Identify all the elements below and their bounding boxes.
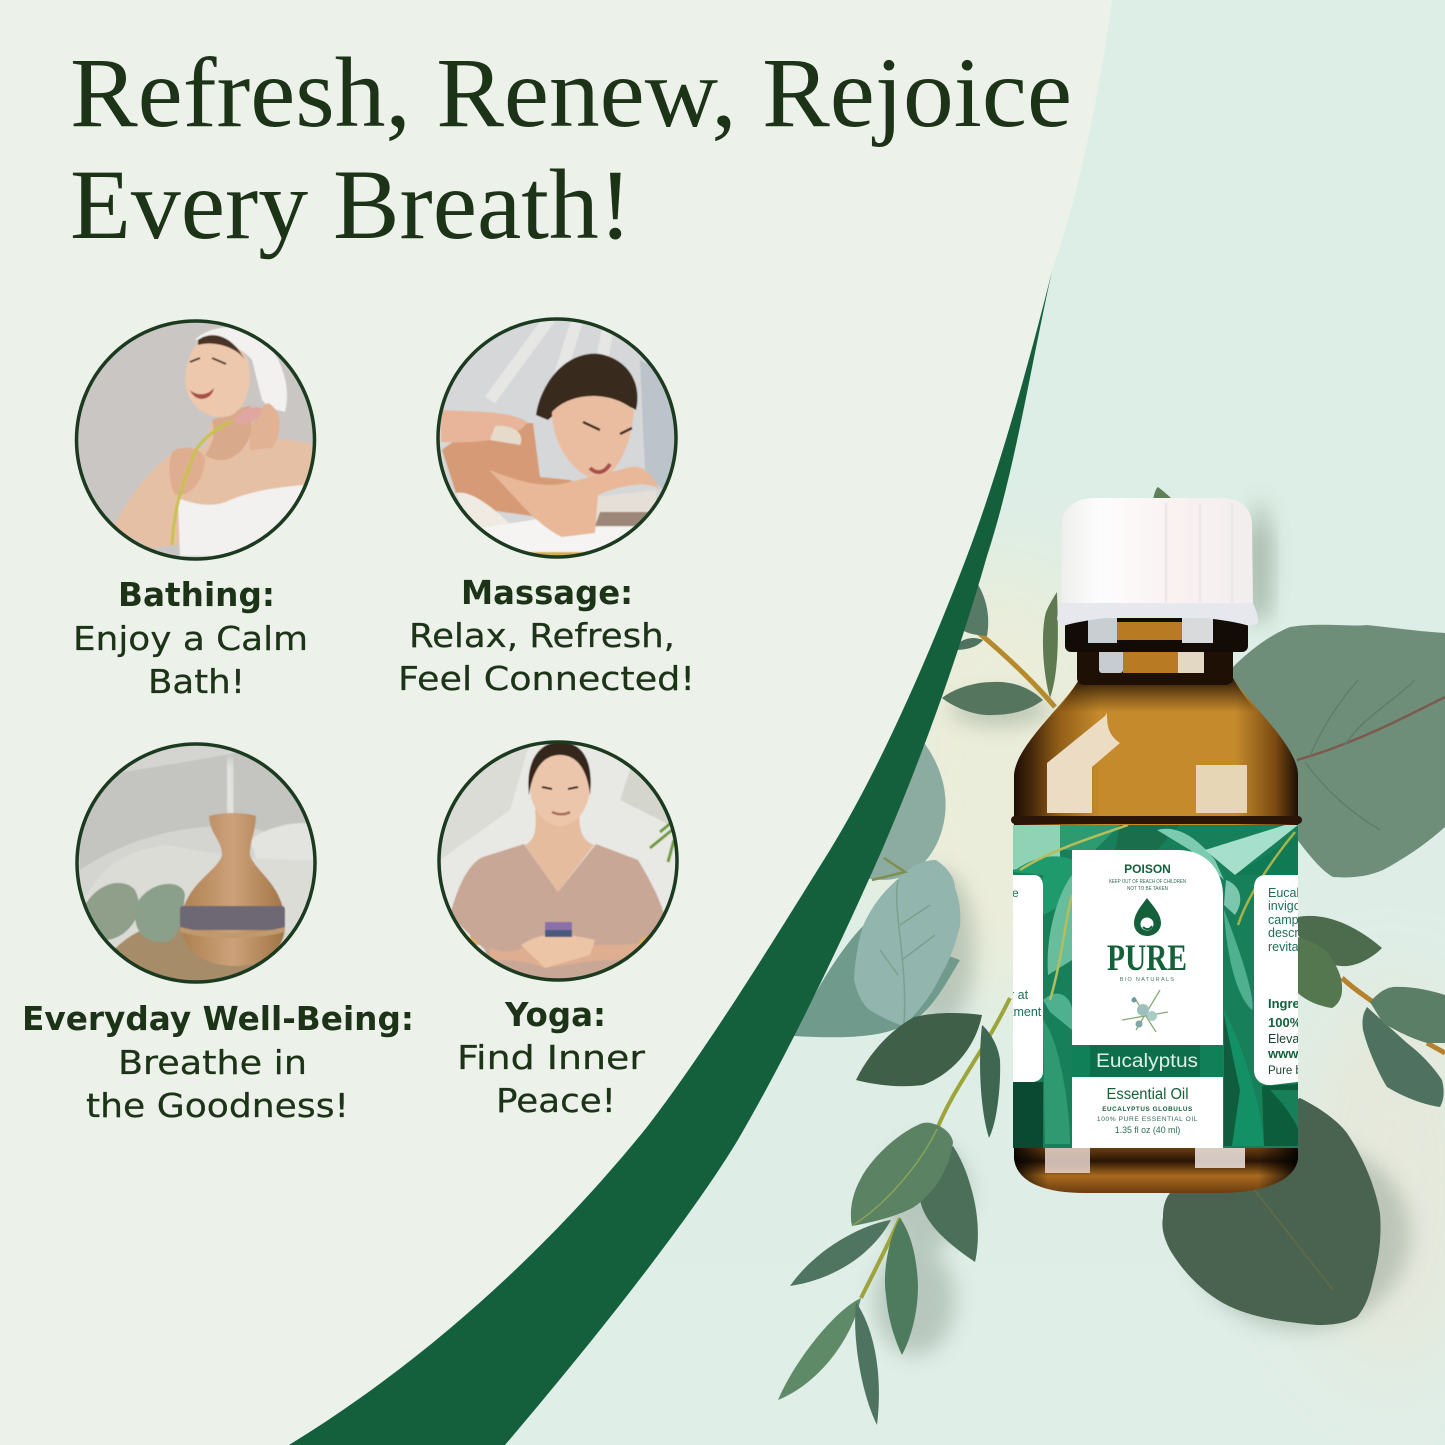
label leaves <box>1013 825 1298 1148</box>
caption: massage: Massage: <box>461 573 633 612</box>
title <box>70 37 1072 260</box>
right sprig <box>1298 916 1445 1107</box>
photo: diffuser <box>75 743 320 990</box>
caption: everyday well-being <box>22 999 414 1125</box>
center white label: EUCALYPTUS GLOBULUS <box>1102 1106 1193 1113</box>
round leaf left top <box>865 744 946 880</box>
caption: everyday well-being: the Goodness! <box>86 1086 349 1125</box>
ring <box>76 321 314 559</box>
title: Every Breath! <box>70 149 632 260</box>
round leaf left middle <box>854 858 960 1026</box>
center white label <box>1072 850 1223 1148</box>
leaf shadows <box>875 500 1410 1355</box>
lower neck windows <box>1099 648 1204 673</box>
right label tag: revital <box>1268 940 1301 954</box>
upper neck <box>1065 618 1248 652</box>
poison warning: POISON <box>1124 862 1171 876</box>
right label tag: Eucaly <box>1268 886 1306 900</box>
right label tag: Elevat <box>1268 1032 1303 1046</box>
shoulder ring <box>1011 816 1302 824</box>
caption: yoga <box>457 995 645 1120</box>
eucalyptus sprigs and leaves <box>778 487 1445 1425</box>
right label tag <box>1254 875 1298 1086</box>
upper neck windows <box>1088 618 1213 643</box>
right label tag: www. <box>1267 1046 1301 1061</box>
center white label: 1.35 fl oz (40 ml) <box>1115 1125 1180 1135</box>
shoulder shading <box>1040 678 1275 735</box>
tiny leaf behind cap <box>1153 487 1173 500</box>
bottle <box>1008 498 1308 1193</box>
bottle base <box>1014 1144 1298 1193</box>
ring <box>438 319 676 557</box>
caption: everyday well-being: Everyday Well-Being: <box>22 999 414 1038</box>
caption: bathing: Bathing: <box>118 575 275 614</box>
right label tag: Pure b <box>1268 1065 1302 1077</box>
left light panel with curved edge <box>0 0 1112 1445</box>
photo: bathing <box>75 320 317 560</box>
base highlights <box>1045 1147 1245 1173</box>
center white label: BIO NATURALS <box>1120 977 1175 983</box>
bottle body <box>1014 678 1298 825</box>
center white label: Eucalyptus <box>1096 1051 1198 1072</box>
cap shadow <box>1240 530 1270 620</box>
left label tag: tment <box>1010 1005 1042 1019</box>
drop logo <box>1134 898 1161 936</box>
large round leaf upper right <box>1200 625 1445 877</box>
ring <box>439 742 677 980</box>
main lower sprig <box>778 998 1010 1425</box>
large round leaf lower right <box>1162 1098 1381 1325</box>
caption: yoga: Find Inner <box>457 1038 645 1077</box>
botanical sprig <box>1122 990 1168 1032</box>
caption: bathing <box>73 575 308 701</box>
base side shading <box>1014 1144 1298 1193</box>
caption: bathing: Enjoy a Calm <box>73 619 308 658</box>
label with leaf pattern <box>1008 825 1308 1148</box>
caption: yoga: Yoga: <box>504 995 606 1034</box>
caption: massage <box>398 573 695 698</box>
right label tag: descri <box>1268 926 1301 940</box>
brand name: PURE <box>1107 938 1187 979</box>
center white label: 100% PURE ESSENTIAL OIL <box>1097 1116 1198 1123</box>
photo: massage <box>437 318 680 560</box>
round leaf left back <box>794 926 960 1037</box>
product name band <box>1072 1045 1223 1077</box>
right label tag: campl <box>1268 913 1301 927</box>
glass highlights <box>1047 713 1247 813</box>
left label tag: e <box>1012 886 1019 900</box>
right label tag: Ingred <box>1268 996 1308 1011</box>
green swoosh band <box>289 271 1052 1445</box>
center white label: NOT TO BE TAKEN <box>1127 886 1168 892</box>
ring <box>77 744 315 982</box>
caption: yoga: Peace! <box>496 1081 616 1120</box>
center white label: KEEP OUT OF REACH OF CHILDREN <box>1109 879 1186 885</box>
caption: everyday well-being: Breathe in <box>118 1043 307 1082</box>
lower neck <box>1077 645 1233 685</box>
caption: massage: Relax, Refresh, <box>409 616 675 655</box>
caption: bathing: Bath! <box>148 662 245 701</box>
right label tag: invigo <box>1268 899 1301 913</box>
top left sprig <box>942 583 1058 715</box>
photo: yoga <box>438 741 680 985</box>
left label tag <box>1013 875 1043 1082</box>
left label tag: r at <box>1010 988 1029 1002</box>
white cap <box>1057 498 1258 626</box>
title: Refresh, Renew, Rejoice <box>70 37 1072 148</box>
right label tag: 100% <box>1268 1015 1302 1030</box>
essential oil text: Essential Oil <box>1106 1086 1188 1103</box>
caption: massage: Feel Connected! <box>398 659 695 698</box>
